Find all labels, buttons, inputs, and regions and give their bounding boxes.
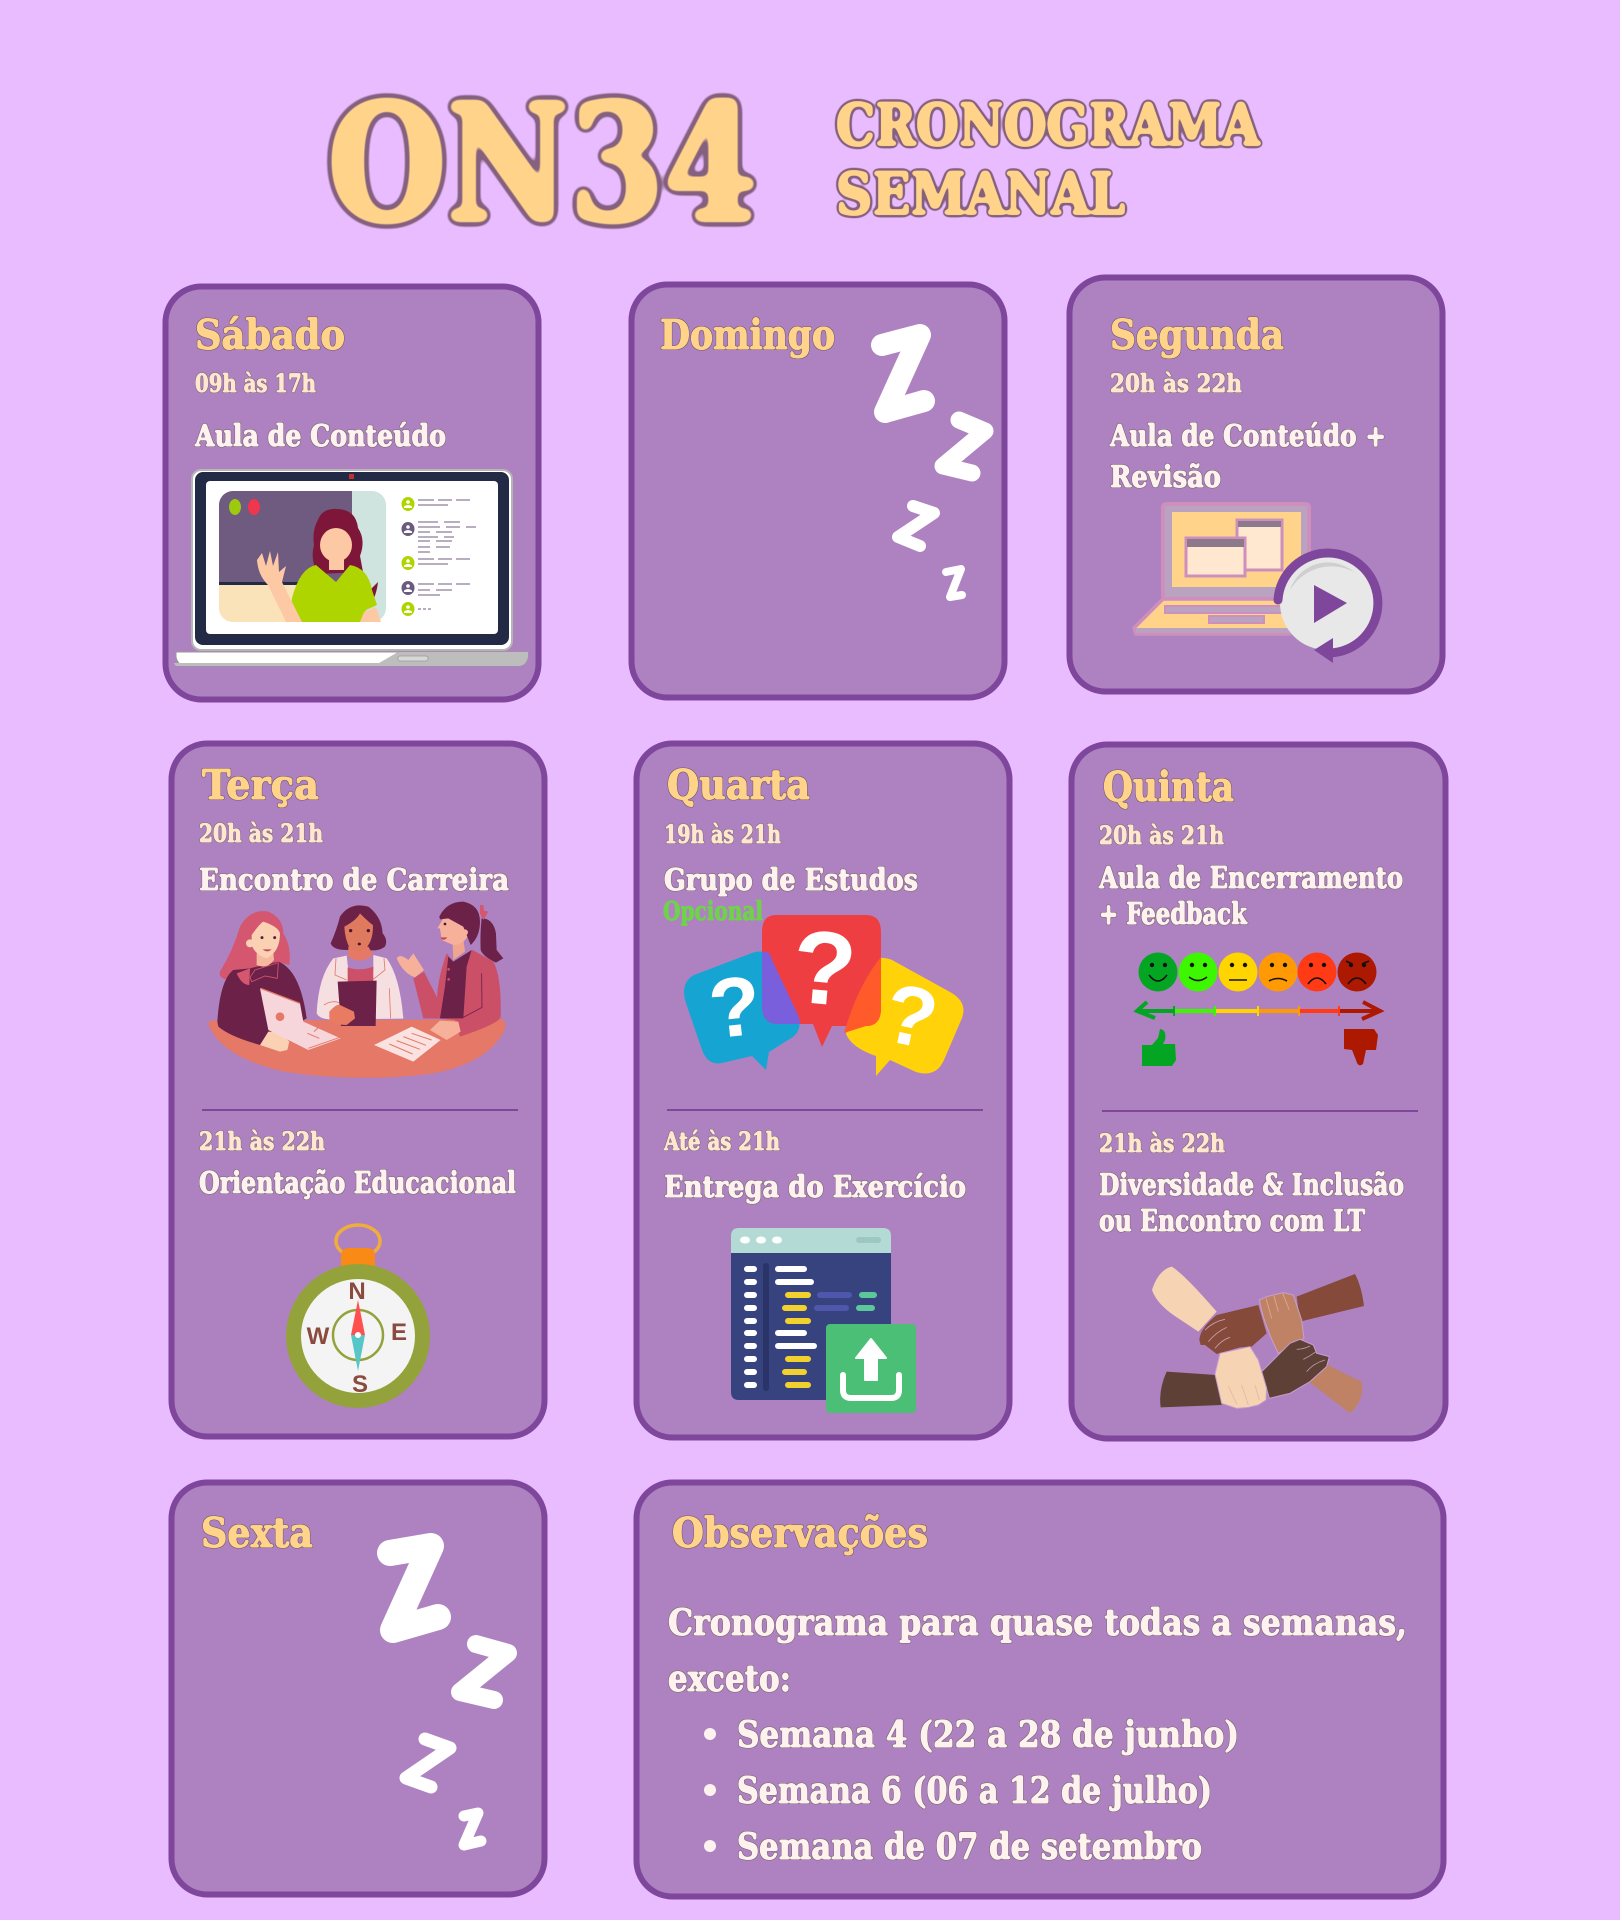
time: Sábado: 09h às 17h xyxy=(195,369,316,398)
title: ON34: ON34 xyxy=(328,69,758,259)
list: exception weeks: Semana 6 (06 a 12 de julho) xyxy=(737,1770,1212,1812)
subtitle: cronograma semanal xyxy=(836,91,1261,228)
activity: Aula de Encerramento + Feedback: Aula de Encerramento xyxy=(1098,861,1403,896)
text: intro xyxy=(668,1602,1407,1700)
icon: compass: N xyxy=(348,1278,366,1305)
heading: Segunda: Segunda xyxy=(1110,311,1284,359)
icon: feedback smiley scale xyxy=(1137,952,1380,1066)
list: exception weeks xyxy=(704,1714,1239,1868)
time: Quinta second slot: 21h às 22h xyxy=(1099,1129,1225,1158)
activity: Aula de Encerramento + Feedback: + Feedback xyxy=(1099,897,1248,932)
heading: Quinta: Quinta xyxy=(1103,763,1234,811)
time: Quarta second slot: Até às 21h xyxy=(663,1127,780,1156)
text: intro: exceto: xyxy=(668,1658,791,1700)
activity: Segunda: Aula de Conteúdo + xyxy=(1109,419,1386,454)
illustration: three women at table xyxy=(208,902,505,1078)
panel: Quinta xyxy=(1072,744,1446,1438)
panel: Domingo xyxy=(632,284,1004,698)
activity: Orientação Educacional: Orientação Educacional xyxy=(199,1166,516,1201)
heading: Domingo: Domingo xyxy=(660,311,835,359)
time: Terça second slot: 21h às 22h xyxy=(199,1127,325,1156)
activity: Aula de Encerramento + Feedback xyxy=(1098,861,1403,932)
note: Opcional: Opcional xyxy=(663,897,763,927)
activity: Grupo de Estudos: Grupo de Estudos xyxy=(664,863,918,898)
icon: compass: S xyxy=(352,1371,368,1398)
panel: Sexta xyxy=(172,1482,544,1894)
icon: code window with upload xyxy=(731,1228,916,1413)
time: Quarta first slot: 19h às 21h xyxy=(664,820,781,849)
activity: Segunda xyxy=(1109,419,1386,495)
icon: sleeping Z letters xyxy=(882,335,985,597)
activity: Sábado: Aula de Conteúdo xyxy=(194,419,446,454)
panel: Observações xyxy=(636,1482,1444,1896)
activity: Encontro de Carreira: Encontro de Carreira xyxy=(199,863,509,898)
icon: question speech bubbles: ? xyxy=(876,965,946,1067)
icon: laptop video call xyxy=(174,470,528,666)
panel: Quarta xyxy=(636,744,1010,1438)
activity: Segunda: Revisão xyxy=(1110,460,1221,495)
icon: compass: E xyxy=(391,1319,407,1346)
activity: Diversidade e Inclusão: Diversidade & Inclusão xyxy=(1099,1168,1404,1203)
panel: Terça xyxy=(172,744,544,1436)
heading: Sábado: Sábado xyxy=(195,311,345,359)
heading: Observações: Observações xyxy=(672,1509,928,1557)
list: exception weeks: Semana de 07 de setembro xyxy=(737,1826,1202,1868)
time: Terça first slot: 20h às 21h xyxy=(199,819,323,848)
activity: Diversidade e Inclusão xyxy=(1099,1168,1404,1239)
panel: Segunda xyxy=(1070,278,1442,692)
list: exception weeks: Semana 4 (22 a 28 de junho) xyxy=(737,1714,1239,1756)
time: Quinta first slot: 20h às 21h xyxy=(1099,821,1224,850)
icon: compass xyxy=(286,1225,430,1408)
heading: Quarta: Quarta xyxy=(667,761,810,809)
subtitle: cronograma semanal: SEMANAL xyxy=(836,160,1125,228)
icon: question speech bubbles: ? xyxy=(787,908,861,1030)
icon: sleeping Z letters xyxy=(390,1546,508,1845)
heading: Terça: Terça xyxy=(202,761,319,809)
heading: Sexta: Sexta xyxy=(201,1509,313,1557)
activity: Entrega do Exercício: Entrega do Exercício xyxy=(664,1170,966,1205)
icon: question speech bubbles: ? xyxy=(704,958,765,1056)
time: Segunda: 20h às 22h xyxy=(1110,369,1242,398)
icon: laptop with replay button xyxy=(1134,504,1378,663)
panel: Sábado xyxy=(166,286,538,700)
text: intro: Cronograma para quase todas a semanas, xyxy=(668,1602,1407,1644)
icon: compass: W xyxy=(307,1323,330,1350)
icon: four linked hands xyxy=(1152,1267,1364,1413)
icon: question speech bubbles xyxy=(684,908,964,1076)
subtitle: cronograma semanal: CRONOGRAMA xyxy=(836,91,1261,159)
activity: Diversidade e Inclusão: ou Encontro com LT xyxy=(1099,1204,1366,1239)
